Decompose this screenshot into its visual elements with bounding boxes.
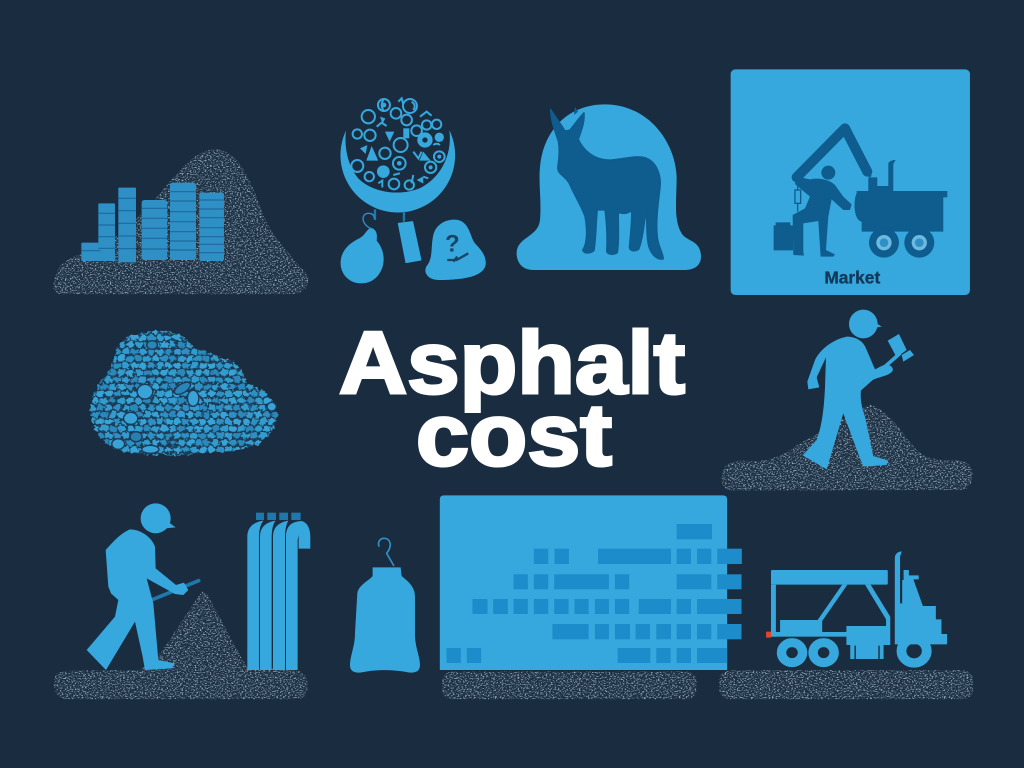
panel: coin stacks on pile	[53, 149, 308, 294]
rake handle	[148, 581, 199, 601]
strip under truck	[719, 670, 973, 699]
far ear	[574, 107, 578, 115]
arm tip	[863, 167, 871, 177]
magnifier bowl	[340, 130, 455, 213]
market card background	[731, 69, 970, 295]
truck frame	[771, 570, 890, 659]
pipes	[247, 521, 310, 670]
table panel	[440, 495, 727, 670]
panel: magnifier with doodles	[340, 98, 486, 283]
question mark: ?	[445, 230, 460, 257]
rear light	[766, 632, 771, 638]
panel: donkey silhouette	[517, 104, 701, 270]
worker	[793, 166, 852, 257]
strip under table	[442, 672, 697, 699]
magnifier stems	[375, 209, 404, 222]
stack separators	[81, 192, 224, 253]
larger rocks	[112, 341, 276, 453]
truck cab	[895, 551, 947, 644]
pipe caps	[256, 513, 301, 520]
truck wheels	[869, 228, 934, 258]
hook	[363, 213, 374, 229]
question blob	[425, 220, 486, 280]
wheels	[782, 639, 927, 663]
icon: flatbed truck	[766, 551, 947, 663]
title line 1: Asphalt	[339, 313, 685, 412]
bag body	[350, 567, 420, 673]
title line 2: cost	[416, 385, 612, 484]
worker	[87, 503, 188, 670]
toolbox	[774, 223, 793, 250]
panel: pricing table	[440, 495, 973, 699]
market label: Market	[824, 267, 880, 287]
title	[339, 313, 685, 484]
panel: walking worker with axe	[722, 310, 972, 491]
coin stacks	[81, 183, 224, 262]
gravel pile	[53, 149, 308, 294]
stripes	[855, 646, 879, 659]
axe	[858, 334, 914, 391]
hydraulic	[795, 182, 801, 212]
bag hook	[379, 538, 394, 566]
rock cloud	[90, 331, 277, 456]
crane arm	[797, 128, 867, 177]
panel: worker spreading gravel	[54, 503, 310, 699]
icon: hanging bag	[350, 538, 420, 673]
panel: rock pile	[90, 331, 277, 456]
panel: market machine card	[731, 69, 970, 295]
gravel pile	[722, 405, 972, 491]
table cells	[446, 524, 742, 663]
gourd with hook	[341, 228, 384, 283]
doodle contents	[351, 98, 445, 190]
magnifier handle	[398, 222, 421, 263]
worker	[803, 310, 893, 469]
doodle solids	[360, 103, 444, 184]
blob squiggle	[447, 253, 468, 262]
donkey backdrop	[517, 104, 701, 270]
gravel strip and cone	[54, 592, 308, 699]
market truck	[855, 160, 947, 232]
donkey	[551, 109, 663, 259]
